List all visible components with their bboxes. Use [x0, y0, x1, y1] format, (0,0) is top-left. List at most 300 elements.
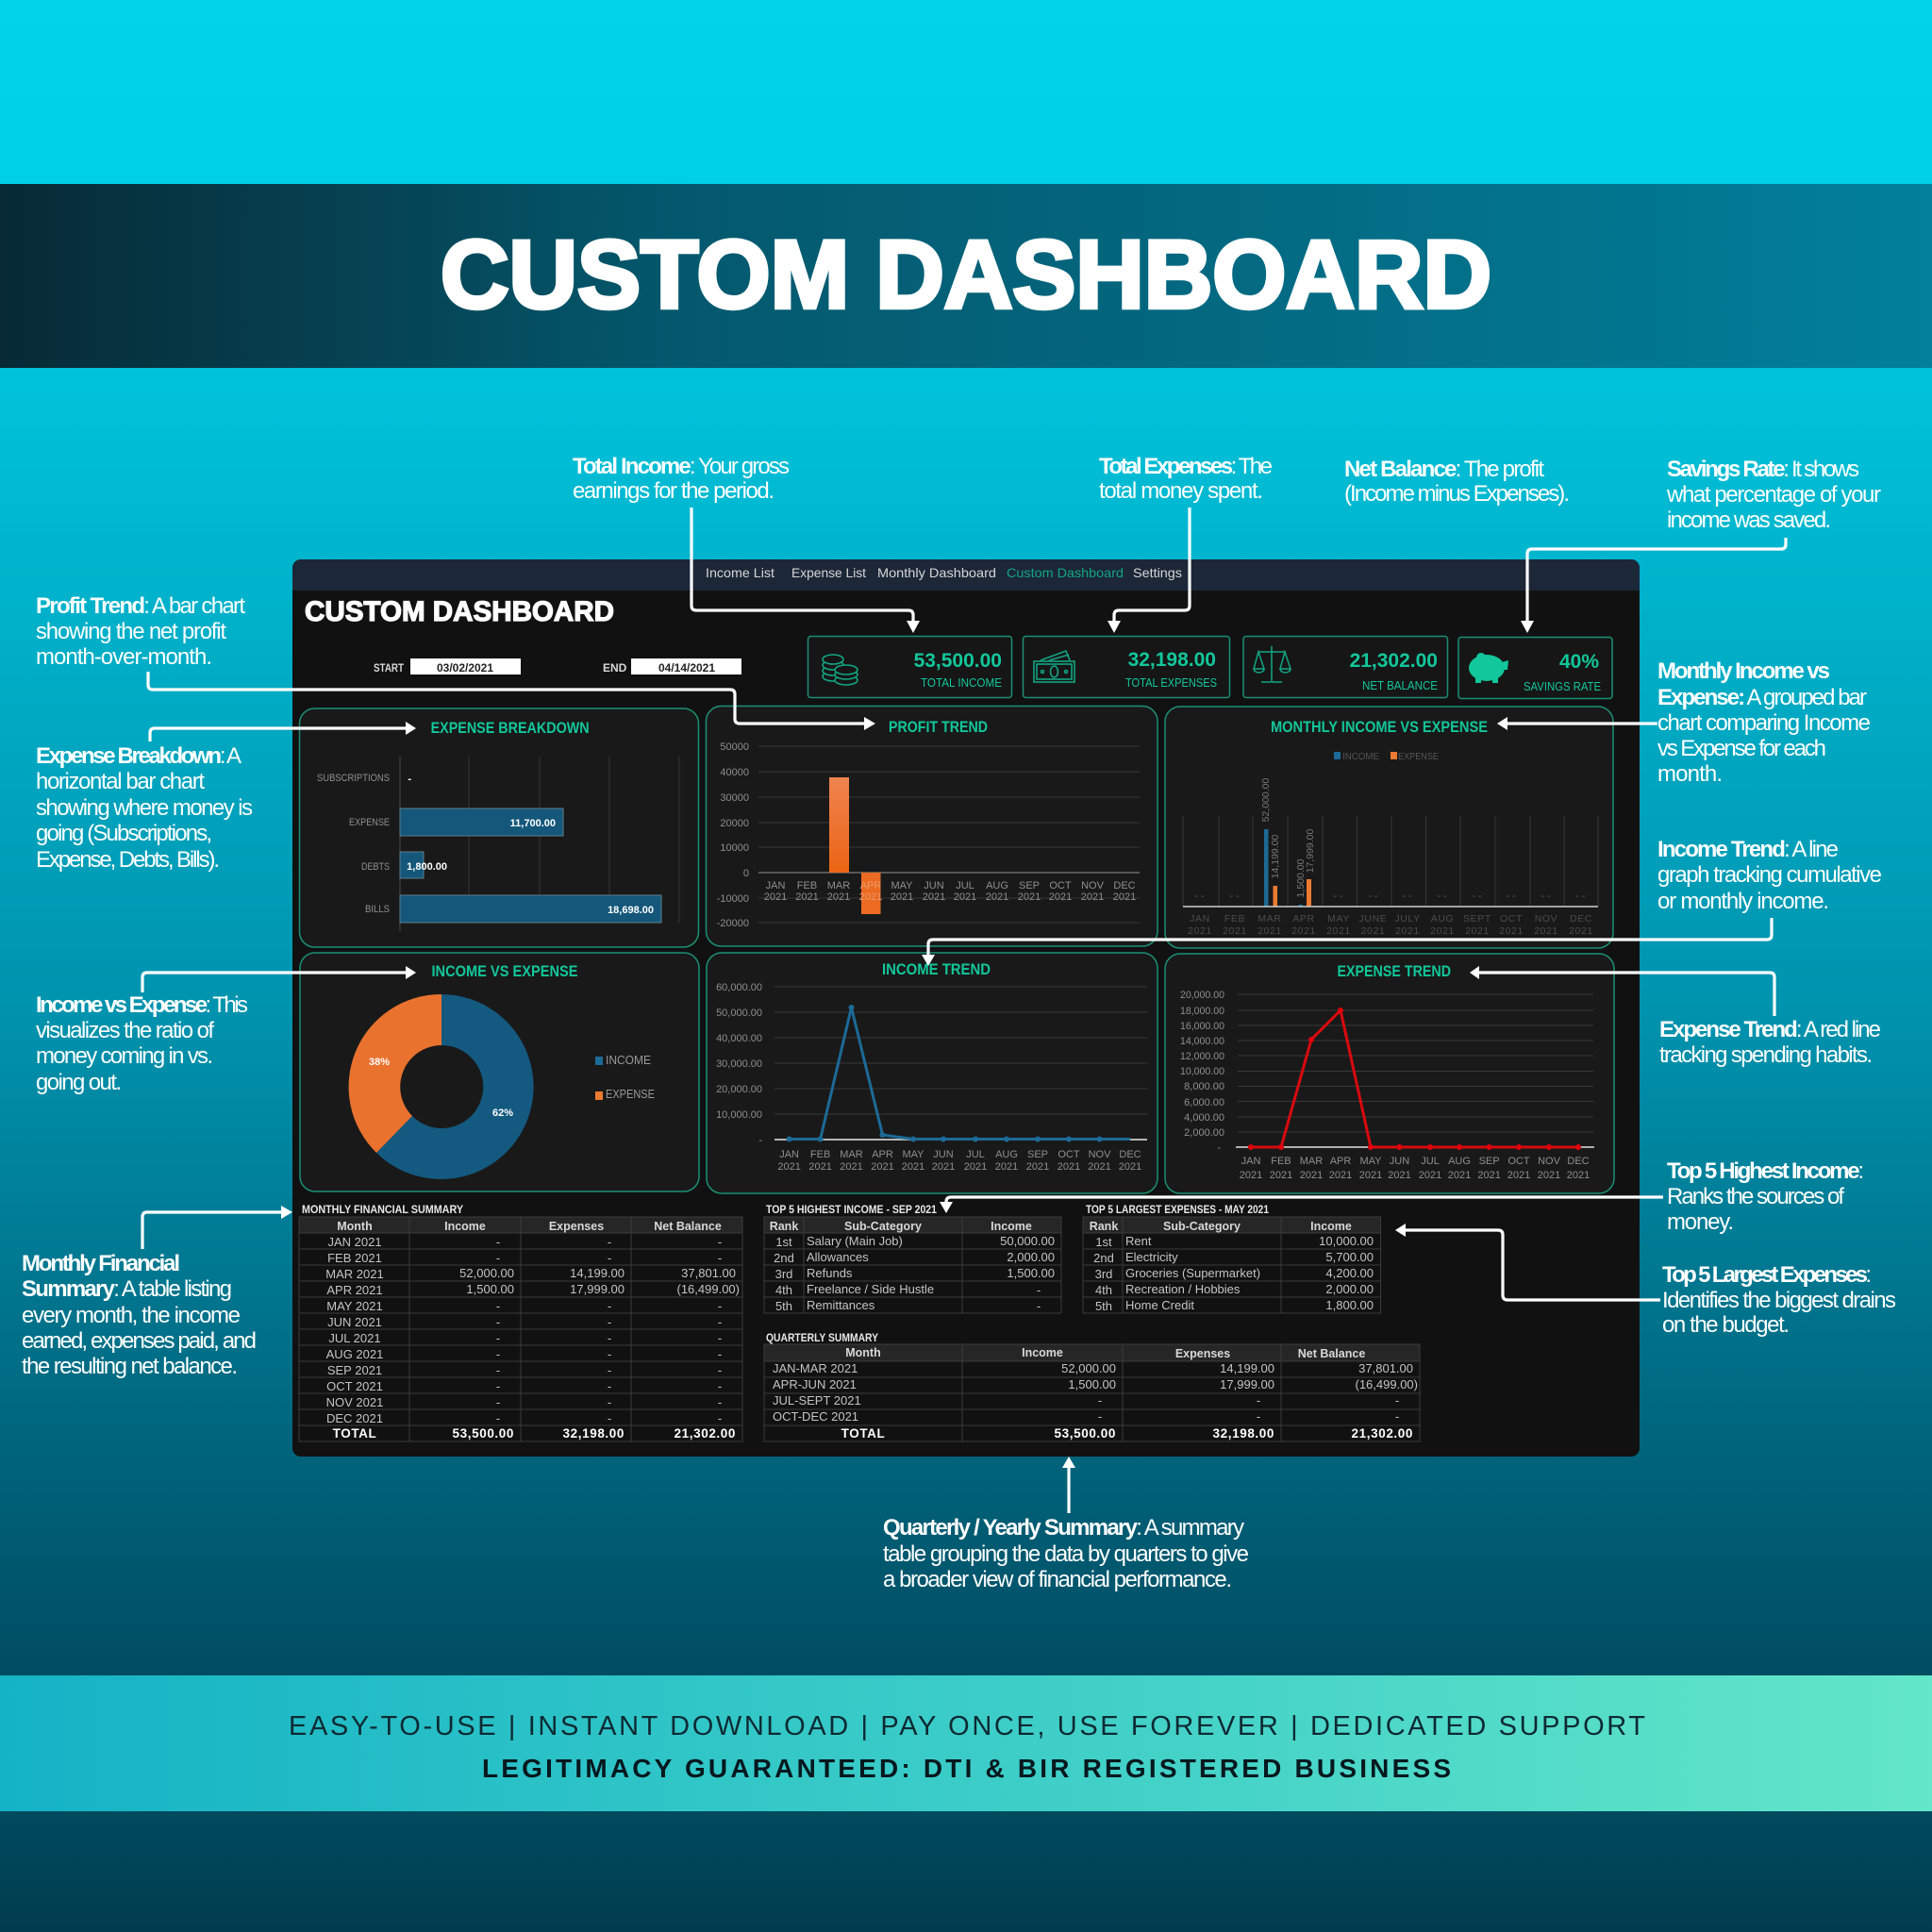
legend: EXPENSE	[606, 1087, 655, 1101]
grouped bar chart: JUNE	[1359, 913, 1387, 924]
callout: income vs expense: going out.	[36, 1070, 122, 1095]
table: monthly financial summary: -	[496, 1299, 500, 1313]
line chart: 8,000.00	[1184, 1081, 1224, 1092]
bar chart: DEC	[1113, 880, 1136, 891]
table: monthly financial summary: MAY 2021	[326, 1299, 383, 1313]
line chart: 16,000.00	[1180, 1021, 1224, 1032]
bar chart: -10000	[717, 893, 749, 905]
arrow: expense trend	[1470, 966, 1774, 1016]
table: quarterly summary: 52,000.00	[1061, 1361, 1116, 1375]
table: monthly financial summary: MAR 2021	[325, 1267, 384, 1281]
callout: quarterly summary: table grouping the data by quarters to give	[883, 1541, 1249, 1567]
table: monthly financial summary: -	[718, 1347, 722, 1361]
table: top 5 highest income: Allowances	[807, 1250, 869, 1264]
grouped bar chart: 2021	[1395, 925, 1420, 937]
KPI: net balance: NET BALANCE	[1362, 678, 1438, 692]
background: top cyan band	[0, 0, 1932, 184]
heading: INCOME TREND	[882, 960, 991, 978]
line chart: OCT	[1507, 1156, 1530, 1167]
callout: total income: Total Income: Your gross	[573, 454, 790, 479]
callout: monthly financial summary: earned, expenses paid, and	[22, 1328, 257, 1354]
arrow: total expenses	[1108, 508, 1190, 633]
line chart: NOV	[1089, 1149, 1111, 1160]
callout: top 5 highest income: Top 5 Highest Income:	[1667, 1158, 1864, 1184]
grouped bar chart: OCT	[1500, 913, 1523, 924]
legend	[595, 1053, 655, 1101]
background: main gradient area	[0, 368, 1932, 1675]
KPI: total income: 53,500.00	[914, 650, 1002, 672]
callout: net balance: (Income minus Expenses).	[1344, 481, 1570, 507]
table: monthly financial summary: -	[608, 1315, 611, 1329]
table: monthly financial summary: -	[608, 1235, 611, 1249]
bar chart: 2021	[954, 891, 976, 903]
callout: top 5 highest income: Ranks the sources of	[1667, 1184, 1844, 1209]
table: top 5 largest expenses: 3rd	[1095, 1267, 1112, 1281]
callout: monthly income vs expense: Monthly Income vs	[1657, 658, 1830, 684]
callout: total expenses	[1099, 454, 1273, 504]
table: monthly financial summary: -	[718, 1363, 722, 1377]
table: top 5 highest income: 4th	[775, 1283, 792, 1297]
line chart: 6,000.00	[1184, 1097, 1224, 1108]
callout: expense trend	[1659, 1017, 1881, 1068]
grouped bar chart: 14,199.00	[1270, 834, 1281, 878]
arrow: quarterly summary	[1062, 1457, 1075, 1513]
callout: income trend: Income Trend: A line	[1657, 837, 1839, 862]
icon: scales	[1254, 646, 1291, 682]
grouped bar chart: FEB	[1224, 913, 1245, 924]
table: top 5 largest expenses: Groceries (Supermarket)	[1125, 1266, 1260, 1280]
table: monthly financial summary: FEB 2021	[327, 1251, 382, 1265]
table: quarterly summary: 37,801.00	[1358, 1361, 1413, 1375]
line chart: 2021	[1088, 1161, 1111, 1173]
line chart: 20,000.00	[1180, 990, 1224, 1001]
line chart: 2021	[995, 1161, 1018, 1173]
callout: monthly income vs expense: Expense: A grouped bar	[1657, 685, 1867, 710]
callout: expense trend: tracking spending habits.	[1659, 1042, 1873, 1068]
grouped bar chart: AUG	[1431, 913, 1454, 924]
table: quarterly summary: 21,302.00	[1352, 1426, 1413, 1441]
table: monthly financial summary: -	[608, 1251, 611, 1265]
table: top 5 highest income: 2nd	[774, 1251, 794, 1265]
bar chart	[717, 741, 1140, 929]
arrow: income trend	[922, 918, 1772, 966]
bar chart: 2021	[795, 891, 819, 903]
table: top 5 highest income: -	[1037, 1283, 1041, 1297]
legend	[1334, 751, 1439, 762]
line chart: 12,000.00	[1180, 1051, 1224, 1062]
line chart: 2021	[840, 1161, 863, 1173]
table: top 5 highest income: 1,500.00	[1007, 1266, 1055, 1280]
horizontal bar chart: -	[408, 774, 411, 785]
table: top 5 largest expenses: 2,000.00	[1325, 1282, 1374, 1296]
table: monthly financial summary: Income	[444, 1220, 486, 1233]
line chart: 60,000.00	[716, 982, 762, 993]
callout: top 5 largest expenses	[1662, 1262, 1896, 1338]
table: monthly financial summary: -	[718, 1235, 722, 1249]
grouped bar chart: 2021	[1499, 925, 1524, 937]
line chart: 2021	[964, 1161, 987, 1173]
table: monthly financial summary: -	[718, 1411, 722, 1425]
footer band	[0, 1675, 1932, 1811]
table: monthly financial summary: NOV 2021	[326, 1395, 383, 1409]
grouped bar chart: 2021	[1569, 925, 1593, 937]
arrow: profit trend	[148, 672, 875, 730]
table: quarterly summary: -	[1395, 1409, 1399, 1424]
table: monthly financial summary: JUN 2021	[327, 1315, 382, 1329]
grouped bar chart: --	[1437, 891, 1450, 902]
line chart: 2021	[1538, 1170, 1560, 1181]
heading: EXPENSE TREND	[1338, 962, 1451, 980]
line chart: 2021	[1359, 1170, 1382, 1181]
table: monthly financial summary: -	[608, 1331, 611, 1345]
table: monthly financial summary: -	[608, 1411, 611, 1425]
table: quarterly summary: JUL-SEPT 2021	[773, 1393, 861, 1407]
heading: INCOME VS EXPENSE	[432, 962, 577, 980]
table: monthly financial summary: SEP 2021	[327, 1363, 382, 1377]
callout: income vs expense: visualizes the ratio of	[36, 1018, 214, 1043]
title band	[0, 184, 1932, 368]
callout: monthly income vs expense: vs Expense for each	[1657, 736, 1826, 761]
table: monthly financial summary: -	[496, 1315, 500, 1329]
callout: quarterly summary: Quarterly / Yearly Summary: A summary	[883, 1515, 1244, 1541]
heading: MONTHLY INCOME VS EXPENSE	[1271, 718, 1488, 736]
bar chart: JUL	[956, 880, 974, 891]
line chart: 2021	[1026, 1161, 1049, 1173]
bar chart: JAN	[766, 880, 785, 891]
table: monthly financial summary: 14,199.00	[570, 1266, 625, 1280]
table: monthly financial summary: -	[496, 1251, 500, 1265]
table: monthly financial summary: Month	[337, 1220, 373, 1233]
callout: top 5 largest expenses: Top 5 Largest Expenses:	[1662, 1262, 1872, 1288]
line chart: 14,000.00	[1180, 1036, 1224, 1047]
grouped bar chart: SEPT	[1463, 913, 1491, 924]
table: quarterly summary: 17,999.00	[1220, 1377, 1274, 1391]
panel: expense trend	[1165, 954, 1614, 1193]
table: monthly financial summary: AUG 2021	[326, 1347, 383, 1361]
line chart: NOV	[1538, 1156, 1561, 1167]
callout: income vs expense	[36, 992, 248, 1095]
callout: monthly income vs expense: month.	[1657, 761, 1723, 787]
panel: monthly income vs expense	[1165, 707, 1613, 948]
bar chart: 2021	[986, 891, 1008, 903]
title: CUSTOM DASHBOARD	[441, 221, 1491, 328]
table: monthly financial summary: JAN 2021	[327, 1235, 382, 1249]
callout: monthly financial summary: Monthly Financial	[22, 1251, 180, 1276]
panel: income vs expense	[300, 953, 699, 1191]
line chart: MAY	[1359, 1156, 1382, 1167]
table: monthly financial summary: -	[608, 1395, 611, 1409]
bar chart: 2021	[1018, 891, 1041, 903]
arrow: income vs expense	[142, 966, 416, 992]
line chart: SEP	[1027, 1149, 1048, 1160]
KPI: total income	[808, 636, 1011, 698]
donut chart: 62%	[492, 1108, 513, 1119]
grouped bar chart: DEC	[1570, 913, 1592, 924]
date filters: END	[603, 661, 627, 675]
bar chart: MAY	[891, 880, 913, 891]
horizontal bar chart: DEBTS	[361, 861, 390, 873]
callout: quarterly summary	[883, 1515, 1249, 1592]
table: quarterly summary: Expenses	[1175, 1347, 1230, 1360]
line chart: 4,000.00	[1184, 1112, 1224, 1124]
line chart: JUN	[933, 1149, 954, 1160]
bar chart: 50000	[720, 741, 749, 753]
date filters: START	[374, 661, 405, 675]
table: monthly financial summary: 1,500.00	[466, 1282, 514, 1296]
table: top 5 highest income: -	[1037, 1299, 1041, 1313]
table: quarterly summary: -	[1098, 1409, 1102, 1424]
callout: monthly financial summary: the resulting net balance.	[22, 1354, 238, 1379]
line chart: 2021	[1419, 1170, 1441, 1181]
grouped bar chart: 1,500.00	[1295, 858, 1307, 897]
grouped bar chart: JULY	[1394, 913, 1421, 924]
legend: EXPENSE	[1398, 751, 1439, 762]
bar chart: SEP	[1019, 880, 1040, 891]
horizontal bar chart: 1,800.00	[407, 861, 447, 873]
icon: piggy bank	[1469, 653, 1508, 683]
horizontal bar chart: EXPENSE	[349, 817, 390, 828]
line chart: 2,000.00	[1184, 1127, 1224, 1139]
bar chart: NOV	[1081, 880, 1105, 891]
table: top 5 highest income: Rank	[770, 1220, 798, 1233]
donut chart: 38%	[369, 1057, 390, 1068]
panel: profit trend	[706, 706, 1158, 946]
grouped bar chart: --	[1333, 891, 1346, 902]
KPI: savings rate: SAVINGS RATE	[1524, 679, 1601, 693]
table: quarterly summary: Month	[845, 1346, 881, 1359]
table: quarterly summary: 1,500.00	[1068, 1377, 1116, 1391]
table: top 5 highest income: Income	[991, 1220, 1032, 1233]
table: quarterly summary: OCT-DEC 2021	[773, 1409, 858, 1424]
bar chart: APR	[860, 880, 881, 891]
grouped bar chart: 2021	[1534, 925, 1558, 937]
table: quarterly summary: -	[1395, 1393, 1399, 1407]
icon: coins	[823, 655, 858, 685]
bar chart: 2021	[764, 891, 787, 903]
KPI: total expenses: 32,198.00	[1128, 649, 1216, 671]
table: monthly financial summary: -	[496, 1347, 500, 1361]
grouped bar chart: --	[1229, 891, 1242, 902]
callout: top 5 largest expenses: on the budget.	[1662, 1312, 1790, 1338]
table: monthly financial summary: (16,499.00)	[677, 1282, 740, 1296]
date filters	[374, 658, 741, 675]
grouped bar chart: 2021	[1291, 925, 1316, 937]
table: quarterly summary: JAN-MAR 2021	[773, 1361, 858, 1375]
bar chart: 2021	[1081, 891, 1104, 903]
horizontal bar chart: SUBSCRIPTIONS	[317, 773, 390, 784]
callout: total expenses: total money spent.	[1099, 478, 1263, 504]
callout: expense breakdown: horizontal bar chart	[36, 769, 205, 794]
line chart: FEB	[810, 1149, 830, 1160]
line chart: JUL	[966, 1149, 985, 1160]
bar chart: JUN	[924, 880, 944, 891]
grouped bar chart: --	[1402, 891, 1415, 902]
callout: monthly financial summary: every month, the income	[22, 1303, 241, 1328]
callout: total income: earnings for the period.	[573, 478, 774, 504]
nav bar	[292, 559, 1640, 591]
table: top 5 highest income: TOP 5 HIGHEST INCOME - SEP 2021	[766, 1205, 938, 1216]
bar chart: OCT	[1049, 880, 1072, 891]
grouped bar chart: --	[1541, 891, 1554, 902]
callout: profit trend: Profit Trend: A bar chart	[36, 593, 245, 619]
KPI: net balance	[1243, 636, 1447, 698]
grouped bar chart: JAN	[1190, 913, 1210, 924]
table: quarterly summary: (16,499.00)	[1355, 1377, 1418, 1391]
callout: quarterly summary: a broader view of financial performance.	[883, 1567, 1232, 1592]
line chart: 18,000.00	[1180, 1006, 1224, 1017]
heading: PROFIT TREND	[889, 718, 988, 736]
table: top 5 highest income: Remittances	[807, 1298, 875, 1312]
table: quarterly summary: -	[1098, 1393, 1102, 1407]
line chart: JUL	[1421, 1156, 1440, 1167]
table: quarterly summary: 32,198.00	[1213, 1426, 1274, 1441]
table: top 5 largest expenses: Rank	[1090, 1220, 1118, 1233]
bar chart: 2021	[827, 891, 850, 903]
table: top 5 largest expenses: 2nd	[1093, 1251, 1114, 1265]
callout: income trend	[1657, 837, 1882, 914]
line chart: 2021	[902, 1161, 924, 1173]
callout: savings rate: Savings Rate: It shows	[1667, 457, 1859, 482]
grouped bar chart: 2021	[1430, 925, 1455, 937]
table: monthly financial summary: -	[496, 1411, 500, 1425]
line chart: MAR	[840, 1149, 863, 1160]
grouped bar chart: 2021	[1188, 925, 1212, 937]
arrow: monthly financial summary	[142, 1206, 292, 1249]
bar chart: 0	[743, 868, 749, 879]
grouped bar chart: NOV	[1535, 913, 1557, 924]
KPI: total expenses: TOTAL EXPENSES	[1125, 675, 1217, 690]
line chart: 2021	[1329, 1170, 1352, 1181]
nav bar: Monthly Dashboard	[877, 565, 996, 580]
grouped bar chart: MAY	[1327, 913, 1350, 924]
table: monthly financial summary: OCT 2021	[326, 1379, 383, 1393]
line chart: APR	[872, 1149, 893, 1160]
grouped bar chart	[1183, 777, 1598, 937]
line chart: 2021	[932, 1161, 955, 1173]
line chart: 50,000.00	[716, 1008, 762, 1019]
grouped bar chart: --	[1368, 891, 1381, 902]
table: monthly financial summary: -	[496, 1379, 500, 1393]
callout: top 5 largest expenses: Identifies the biggest drains	[1662, 1288, 1896, 1313]
callout: expense trend: Expense Trend: A red line	[1659, 1017, 1881, 1042]
table: top 5 highest income: 50,000.00	[1000, 1234, 1055, 1248]
horizontal bar chart: BILLS	[365, 904, 390, 915]
line chart: 2021	[871, 1161, 894, 1173]
line chart: AUG	[1448, 1156, 1471, 1167]
nav bar: Income List	[706, 565, 774, 580]
line chart: 2021	[1567, 1170, 1590, 1181]
grouped bar chart: 2021	[1465, 925, 1490, 937]
table: monthly financial summary: Net Balance	[654, 1220, 722, 1233]
bar chart: 10000	[720, 842, 749, 854]
callout: income vs expense: Income vs Expense: This	[36, 992, 248, 1018]
line chart: 2021	[1448, 1170, 1471, 1181]
table: top 5 highest income	[764, 1205, 1061, 1313]
table: top 5 highest income: Refunds	[807, 1266, 853, 1280]
grouped bar chart: MAR	[1257, 913, 1282, 924]
arrow: expense breakdown	[150, 722, 416, 741]
callout: savings rate: what percentage of your	[1666, 482, 1881, 508]
line chart: 2021	[808, 1161, 832, 1173]
grouped bar chart: --	[1575, 891, 1589, 902]
horizontal bar chart: 18,698.00	[608, 905, 654, 916]
callout: monthly income vs expense	[1657, 658, 1871, 787]
table: top 5 highest income: Sub-Category	[844, 1220, 922, 1233]
table: monthly financial summary: 32,198.00	[563, 1426, 625, 1441]
line chart: 2021	[1270, 1170, 1292, 1181]
grouped bar chart: 2021	[1361, 925, 1385, 937]
bar chart: 20000	[720, 818, 749, 829]
callout: profit trend: month-over-month.	[36, 644, 212, 670]
table: top 5 largest expenses: 4,200.00	[1325, 1266, 1374, 1280]
table: monthly financial summary: -	[718, 1251, 722, 1265]
grouped bar chart: --	[1472, 891, 1485, 902]
callout: expense breakdown: showing where money is	[36, 795, 253, 821]
grouped bar chart: 17,999.00	[1305, 828, 1316, 873]
line chart: FEB	[1271, 1156, 1291, 1167]
table: quarterly summary	[764, 1333, 1420, 1441]
panel: dashboard screenshot	[292, 559, 1640, 1457]
table: top 5 largest expenses: TOP 5 LARGEST EXPENSES - MAY 2021	[1086, 1205, 1270, 1216]
line chart: 30,000.00	[716, 1058, 762, 1070]
line chart	[1180, 990, 1594, 1181]
table: monthly financial summary: -	[496, 1331, 500, 1345]
arrow: total income	[691, 508, 920, 633]
table: quarterly summary: Income	[1022, 1346, 1063, 1359]
table: top 5 largest expenses: Recreation / Hobbies	[1125, 1282, 1241, 1296]
horizontal bar chart: 11,700.00	[510, 818, 556, 829]
callout: expense breakdown: going (Subscriptions,	[36, 821, 212, 846]
dashboard heading: CUSTOM DASHBOARD	[305, 596, 614, 627]
bar chart: 2021	[1049, 891, 1072, 903]
table: monthly financial summary: 17,999.00	[570, 1282, 625, 1296]
callout: expense breakdown: Expense, Debts, Bills).	[36, 847, 220, 873]
table: monthly financial summary: Expenses	[549, 1220, 604, 1233]
table: top 5 largest expenses: Income	[1310, 1220, 1352, 1233]
panel: income trend	[707, 953, 1158, 1193]
grouped bar chart: 2021	[1326, 925, 1351, 937]
line chart: 2021	[1240, 1170, 1262, 1181]
KPI: savings rate	[1458, 638, 1612, 698]
KPI: net balance: 21,302.00	[1350, 650, 1438, 672]
line chart: -	[1217, 1142, 1221, 1154]
KPI: total expenses	[1023, 636, 1230, 698]
table: top 5 largest expenses: 5,700.00	[1325, 1250, 1374, 1264]
table: monthly financial summary: 52,000.00	[459, 1266, 514, 1280]
line chart: DEC	[1119, 1149, 1141, 1160]
callout: monthly income vs expense: chart comparing Income	[1657, 710, 1871, 736]
table: top 5 largest expenses: Rent	[1125, 1234, 1152, 1248]
legend: INCOME	[606, 1053, 651, 1067]
line chart: 20,000.00	[716, 1084, 762, 1095]
bar chart: AUG	[986, 880, 1008, 891]
table: top 5 highest income: 2,000.00	[1007, 1250, 1055, 1264]
arrow: monthly income vs expense	[1497, 717, 1657, 730]
background: bottom dark band	[0, 1811, 1932, 1932]
grouped bar chart: --	[1194, 891, 1208, 902]
arrow: top 5 highest income	[940, 1197, 1663, 1213]
horizontal bar chart	[317, 757, 679, 931]
bar chart: 40000	[720, 767, 749, 778]
bar chart: 2021	[1113, 891, 1136, 903]
table: top 5 largest expenses: Home Credit	[1125, 1298, 1194, 1312]
table: monthly financial summary: -	[496, 1395, 500, 1409]
table: quarterly summary: -	[1257, 1409, 1260, 1424]
line chart: AUG	[995, 1149, 1018, 1160]
bar chart: 2021	[859, 891, 882, 903]
table: quarterly summary: -	[1257, 1393, 1260, 1407]
table: monthly financial summary: -	[608, 1347, 611, 1361]
